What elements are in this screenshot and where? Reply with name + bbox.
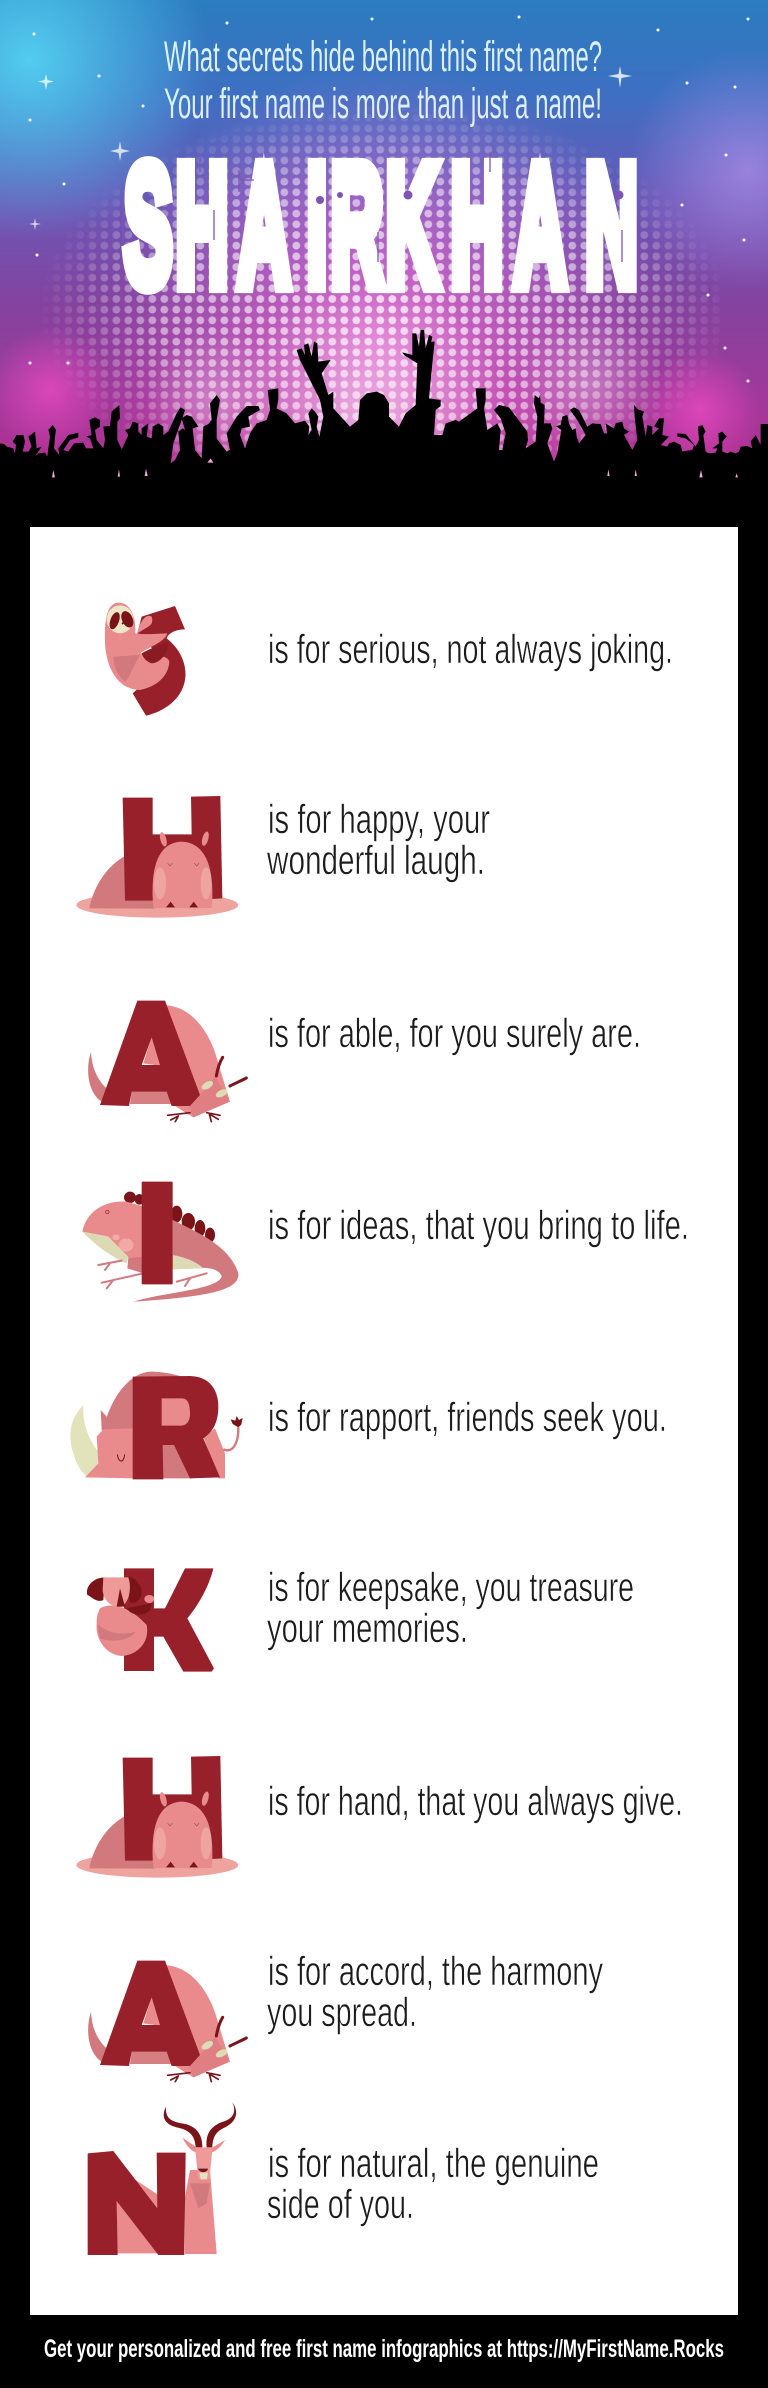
text: A lines: is for accord, the harmony — [268, 1948, 603, 1994]
icon: iguana with letter I — [82, 1182, 238, 1302]
solid black band below crowd — [0, 478, 768, 530]
header: concert stage background — [0, 0, 768, 464]
icon: gazelle with letter N — [88, 2102, 236, 2255]
text: K lines: your memories. — [267, 1605, 468, 1651]
row: A (second) — [88, 1948, 603, 2082]
icon: koala on letter K — [87, 1568, 214, 1672]
text: A lines: you spread. — [267, 1989, 417, 2035]
text: N lines: side of you. — [267, 2181, 414, 2227]
row: S — [105, 603, 673, 716]
tagline — [164, 33, 602, 128]
white content panel — [30, 527, 738, 2315]
crowd silhouette — [0, 330, 768, 490]
row: R — [70, 1372, 667, 1479]
row: H (second) — [76, 1756, 683, 1878]
icon: armadillo with letter A — [88, 1961, 246, 2082]
text: H lines — [266, 796, 490, 883]
text: K lines — [267, 1564, 634, 1651]
row: I — [82, 1182, 689, 1302]
icon: hippo with letter H — [76, 1756, 238, 1878]
row: K — [87, 1564, 634, 1672]
icon: armadillo with letter A — [88, 1001, 246, 1122]
text: H lines: is for happy, your — [268, 796, 490, 842]
text: H lines: wonderful laugh. — [266, 837, 485, 883]
icon: rhino with letter R — [70, 1372, 243, 1479]
row: A — [88, 1001, 641, 1122]
icon: hippo with letter H — [76, 796, 238, 918]
row: H — [76, 796, 490, 918]
text: N lines — [267, 2140, 599, 2227]
row: N — [88, 2102, 599, 2255]
text: A lines — [267, 1948, 603, 2035]
title: SHAIRKHAN: SHAIRKHAN — [124, 131, 638, 320]
text: N lines: is for natural, the genuine — [268, 2140, 599, 2186]
icon: sloth on letter S — [105, 603, 186, 716]
